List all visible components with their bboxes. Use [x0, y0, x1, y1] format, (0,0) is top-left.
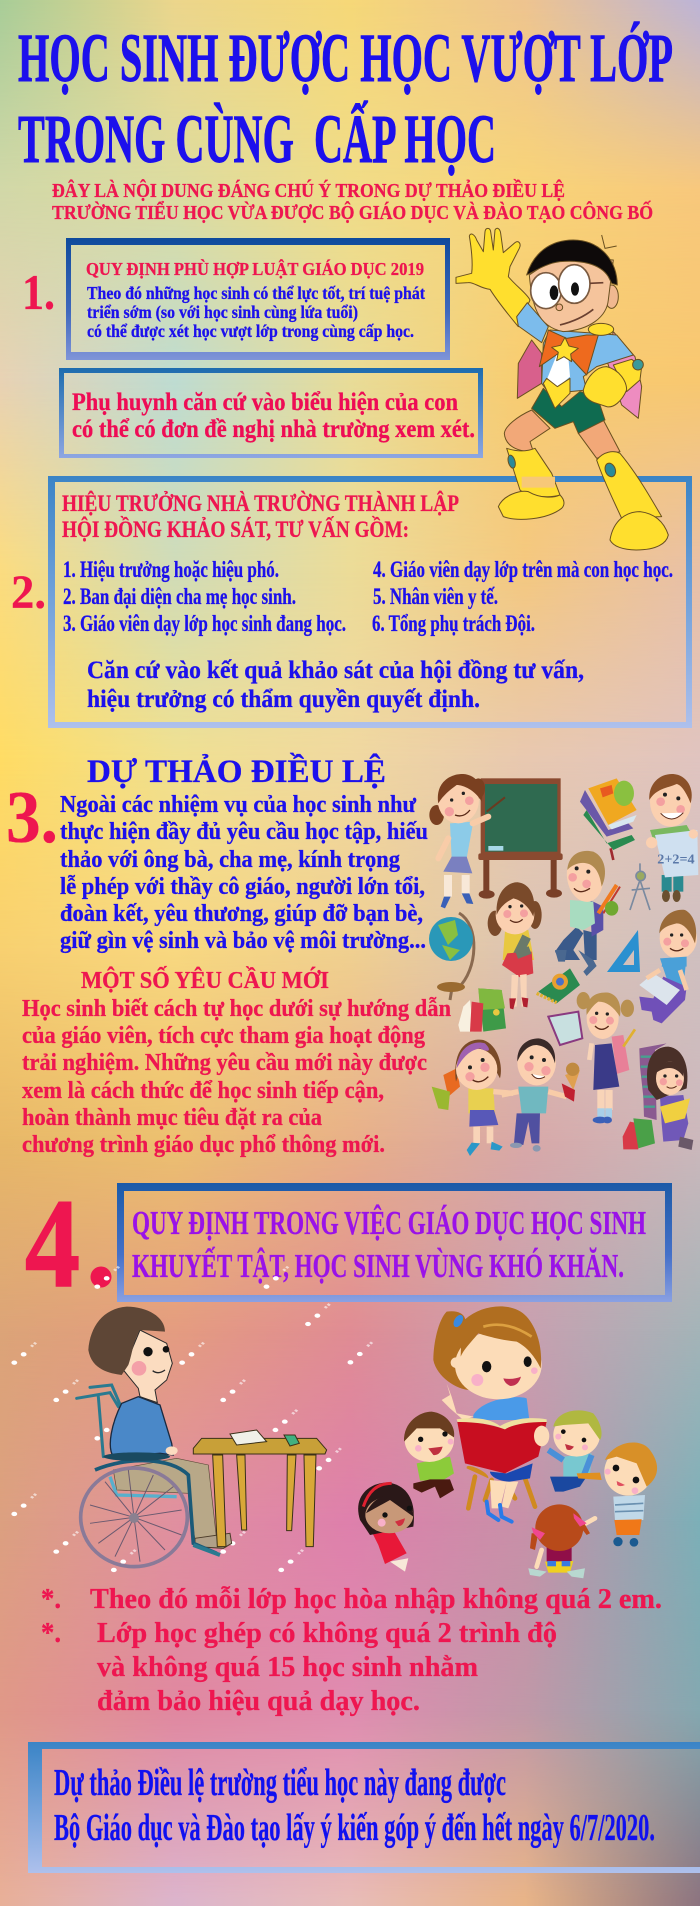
- bullet list: và không quá 15 học sinh nhằm: [97, 1651, 478, 1683]
- bullet list: [41, 1583, 662, 1717]
- number 3: 3.: [6, 777, 58, 859]
- girl middle: [488, 882, 542, 960]
- child green shirt: [404, 1412, 454, 1498]
- new requirements text: chương trình giáo dục phổ thông mới.: [22, 1132, 385, 1158]
- council members list: 2. Ban đại diện cha mẹ học sinh.: [63, 584, 296, 609]
- parents text: Phụ huynh căn cứ vào biểu hiện của con: [72, 389, 458, 416]
- panel text: [87, 283, 425, 341]
- panel: closing note: [28, 1742, 700, 1873]
- panel text: triển sớm (so với học sinh cùng lứa tuổi): [87, 302, 358, 322]
- boy with paper: 2+2=4: [657, 852, 695, 867]
- running boy feet: [555, 950, 597, 976]
- panel: parents: [59, 368, 483, 458]
- bullet list: *.: [41, 1583, 61, 1615]
- boy with paper: [646, 774, 698, 902]
- new requirements text: Học sinh biết cách tự học dưới sự hướng dẫn: [22, 996, 451, 1022]
- council decision: Căn cứ vào kết quả khảo sát của hội đồng tư vấn,: [87, 657, 584, 684]
- subtitle: ĐÂY LÀ NỘI DUNG ĐÁNG CHÚ Ý TRONG DỰ THẢO ĐIỀU LỆ: [52, 178, 565, 202]
- panel: law 2019: [66, 238, 450, 360]
- backpack: [458, 988, 506, 1032]
- panel text: Theo đó những học sinh có thể lực tốt, trí tuệ phát: [87, 283, 425, 303]
- section 3 text: [60, 792, 428, 954]
- books and apple: [580, 778, 637, 860]
- illustration: school children lower: [432, 950, 693, 1156]
- new requirements text: trải nghiệm. Những yêu cầu mới này được: [22, 1050, 427, 1076]
- parents text: [72, 389, 475, 443]
- new requirements heading: MỘT SỐ YÊU CẦU MỚI: [81, 967, 329, 994]
- girl bottom left: [432, 1040, 513, 1156]
- section 3 text: thực hiện đầy đủ yêu cầu học tập, hiếu: [60, 819, 428, 845]
- panel heading: QUY ĐỊNH PHÙ HỢP LUẬT GIÁO DỤC 2019: [86, 258, 424, 279]
- council members list: 1. Hiệu trưởng hoặc hiệu phó.: [63, 557, 279, 582]
- council members list: 5. Nhân viên y tế.: [373, 584, 498, 609]
- bullet list: *.: [41, 1617, 61, 1649]
- council heading: HỘI ĐỒNG KHẢO SÁT, TƯ VẤN GỒM:: [62, 516, 409, 542]
- icon: set square: [607, 930, 640, 972]
- icon: globe: [429, 913, 474, 1000]
- compass: [630, 863, 650, 910]
- section 3 text: lễ phép với thầy cô giáo, người lớn tổi,: [60, 874, 425, 900]
- section 3 heading: DỰ THẢO ĐIỀU LỆ: [87, 751, 386, 790]
- new requirements text: [22, 996, 451, 1158]
- panel: section 4 heading: [117, 1183, 672, 1302]
- backpack small: [623, 1118, 655, 1149]
- number 4: 4: [25, 1174, 80, 1314]
- bullet list: Theo đó mỗi lớp học hòa nhập không quá 2 em.: [90, 1583, 662, 1615]
- title: [18, 20, 673, 177]
- council members list: 6. Tổng phụ trách Đội.: [372, 611, 535, 636]
- section 3 text: đoàn kết, yêu thương, giúp đỡ bạn bè,: [60, 901, 423, 927]
- council heading: [62, 490, 459, 542]
- girl with pigtails: [577, 992, 635, 1123]
- illustration: teacher reading to children: [358, 1306, 657, 1578]
- number 1: 1.: [22, 264, 55, 320]
- council decision: hiệu trưởng có thẩm quyền quyết định.: [87, 686, 480, 713]
- boy right: [659, 910, 697, 967]
- trousers: [113, 1458, 217, 1540]
- boy with backpack: [555, 849, 620, 960]
- bullet list: đảm bảo hiệu quả dạy học.: [97, 1685, 420, 1717]
- council heading: HIỆU TRƯỞNG NHÀ TRƯỜNG THÀNH LẬP: [62, 490, 459, 516]
- section 4 heading text: [132, 1204, 646, 1285]
- new requirements text: xem là cách thức để học sinh tiếp cận,: [22, 1078, 384, 1104]
- parents text: có thể có đơn đề nghị nhà trường xem xét.: [72, 416, 475, 443]
- boy reading: [639, 957, 687, 1023]
- section 3 text: giữ gìn vệ sinh và bảo vệ môi trường...: [60, 928, 426, 954]
- icon: superhero boy: [456, 228, 668, 550]
- sparkles: [11, 1266, 373, 1572]
- open book: [548, 1012, 582, 1045]
- council members list: [63, 557, 673, 636]
- panel text: có thể được xét học vượt lớp trong cùng cấp học.: [87, 321, 414, 341]
- girl at board: [429, 774, 505, 908]
- boy bottom middle: [502, 1038, 580, 1152]
- closing note text: [54, 1762, 655, 1849]
- child from behind: [528, 1504, 595, 1578]
- panel: survey council: [48, 476, 692, 728]
- section 3 text: thảo với ông bà, cha mẹ, kính trọng: [60, 847, 400, 873]
- table: [193, 1430, 327, 1547]
- teacher: [433, 1306, 549, 1522]
- subtitle: [52, 178, 653, 224]
- chalkboard: [478, 778, 563, 899]
- girl with book stack: [639, 1043, 693, 1150]
- number 2: 2.: [11, 566, 46, 619]
- new requirements text: của giáo viên, tích cực tham gia hoạt động: [22, 1023, 425, 1049]
- new requirements text: hoàn thành mục tiêu đặt ra của: [22, 1105, 322, 1131]
- council decision: [87, 657, 584, 713]
- torso: [110, 1397, 173, 1457]
- child blonde: [548, 1410, 602, 1492]
- section 3 text: Ngoài các nhiệm vụ của học sinh như: [60, 792, 417, 818]
- bullet list: Lớp học ghép có không quá 2 trình độ: [97, 1617, 557, 1649]
- child dark hair girl: [358, 1483, 414, 1572]
- head: [123, 1330, 172, 1403]
- council members list: 3. Giáo viên dạy lớp học sinh đang học.: [63, 611, 346, 636]
- child orange hair: [577, 1442, 657, 1547]
- crayon box: [537, 968, 580, 1003]
- girl middle skirt and legs: [502, 950, 533, 1009]
- illustration: school children upper: [429, 774, 698, 967]
- illustration: boy in wheelchair at table: [77, 1307, 327, 1567]
- wheelchair: [77, 1385, 220, 1567]
